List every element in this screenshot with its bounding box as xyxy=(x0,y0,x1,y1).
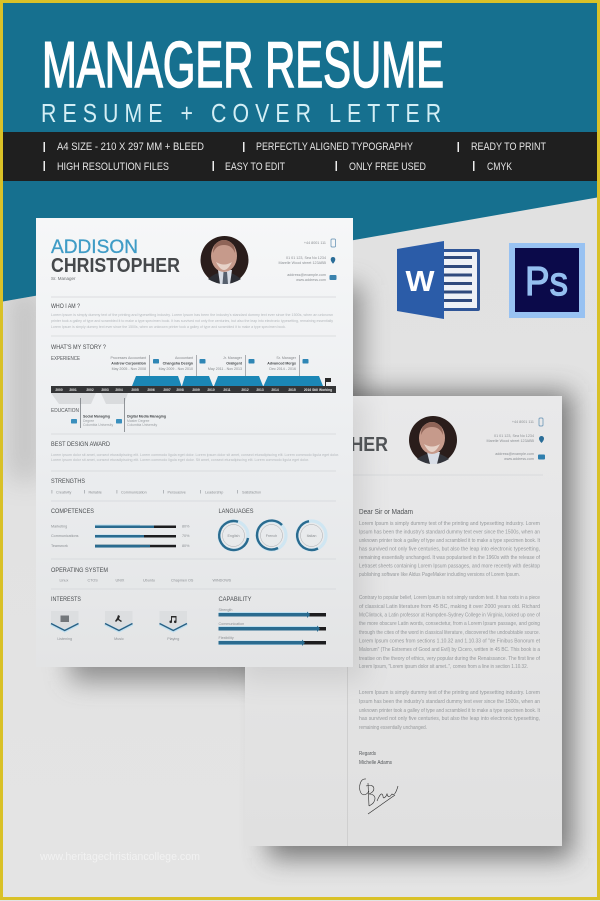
timeline years: 2009 xyxy=(192,388,200,392)
competences: COMPETENCES xyxy=(51,508,94,515)
competences: Communications xyxy=(51,534,79,538)
letter paragraph three: remaining essentially unchanged. xyxy=(359,725,427,731)
what's my story heading: WHAT'S MY STORY ? xyxy=(51,344,106,351)
row two features: ONLY FREE USED xyxy=(349,161,426,173)
shadow: resume over cover letter xyxy=(240,396,365,681)
experience labels: May 2009 - Nov 2010 xyxy=(159,367,193,371)
letter paragraph three: Ipsum has been the industry's standard dummy text ever since the 1500s, when an xyxy=(359,699,540,705)
timeline years: 2013 xyxy=(256,388,264,392)
experience labels: Andrew Corporation xyxy=(111,362,146,366)
name: Sr. Manager xyxy=(51,276,76,281)
timeline bar xyxy=(51,386,336,393)
row one features: READY TO PRINT xyxy=(471,141,546,153)
shadow: cover letter xyxy=(268,392,572,858)
who i am xyxy=(51,303,333,329)
languages xyxy=(218,508,326,550)
education entries: Digital Media Managing xyxy=(127,414,167,418)
left edge shading xyxy=(8,290,42,480)
letter paragraph one: Ipsum has been the industry's standard dummy text ever since the 1500s, when an xyxy=(359,530,540,536)
best design award: BEST DESIGN AWARD xyxy=(51,441,110,448)
timeline years: 2014 xyxy=(271,388,279,392)
language ring: Italian: Italian xyxy=(307,534,316,538)
salutation: Dear Sir or Madam xyxy=(359,509,413,516)
strengths: Communication xyxy=(121,490,147,494)
strengths xyxy=(51,478,261,494)
experience labels xyxy=(110,356,297,371)
cover letter contact details: 01 01 123, Sea No 1234 xyxy=(494,434,534,438)
language ring: English: English xyxy=(227,534,240,538)
operating system: CTOS xyxy=(88,578,98,582)
letter paragraph two: Lorem Ipsum comes from sections 1.10.32 and 1.10.33 of "de Finibus Bonorum et xyxy=(359,638,541,644)
operating system: UNIX xyxy=(116,578,125,582)
contact details: www.address.com xyxy=(296,278,326,282)
strengths: Persuasive xyxy=(168,490,186,494)
timeline years: 2001 xyxy=(69,388,77,392)
sign-off: Regards xyxy=(359,751,376,757)
cover letter contact details: Marelle Wood street 123ABB xyxy=(487,439,535,443)
sign-off xyxy=(359,751,392,766)
timeline years: 2015 xyxy=(288,388,296,392)
interests xyxy=(51,596,187,641)
competences xyxy=(51,508,190,548)
letter paragraph three: Lorem Ipsum is simply dummy text of the printing and typesetting industry. Lorem xyxy=(359,690,540,696)
cover letter contact details xyxy=(487,418,545,461)
capability xyxy=(218,596,326,646)
competences: 80% xyxy=(182,524,190,528)
letter paragraph three: has survived not only five centuries, but also the leap into electronic typesetting, xyxy=(359,716,540,722)
experience stems xyxy=(150,355,300,376)
letter paragraph one: unknown printer took a galley of type and scrambled it to make a type specimen book. It xyxy=(359,538,541,544)
row two features: HIGH RESOLUTION FILES xyxy=(57,161,169,173)
experience labels: Dec 2014 - 2016 xyxy=(269,367,296,371)
name xyxy=(51,237,180,281)
row one features xyxy=(44,141,546,153)
letter paragraph two: Contrary to popular belief, Lorem Ipsum is not simply random text. It has roots in a piece xyxy=(359,595,540,601)
sign-off: Michelle Adams xyxy=(359,760,392,766)
name: ADDISON xyxy=(51,237,138,258)
strengths: STRENGTHS xyxy=(51,478,85,485)
strengths: Reliable xyxy=(88,490,102,494)
contact details xyxy=(279,239,336,282)
timeline chart xyxy=(51,355,336,404)
experience labels: Changsha Design xyxy=(163,362,193,366)
shadow: resume xyxy=(70,285,362,681)
competences: 80% xyxy=(182,544,190,548)
icon: Photoshop xyxy=(509,243,585,318)
cover letter name: CHRISTOPHER xyxy=(259,434,388,456)
letter paragraph one: has survived not only five centuries, but also the leap into electronic typesetting, xyxy=(359,546,540,552)
contact details: Marelle Wood street 123ABB xyxy=(279,261,327,265)
education entries: Degree xyxy=(83,419,94,423)
timeline years: 2000 xyxy=(55,388,63,392)
margin line xyxy=(347,660,348,846)
letter paragraph two: McClintock, a Latin professor at Hampden-Sydney College in Virginia, looked up one of xyxy=(359,612,541,618)
timeline years: 2016 Still Working xyxy=(304,388,332,392)
timeline years: 2010 xyxy=(207,388,215,392)
contact details: +44 8001 111 xyxy=(304,241,326,245)
letter paragraph three: unknown printer took a galley of type and scrambled it to make a type specimen book. It xyxy=(359,708,541,714)
cover letter contact details: www.address.com xyxy=(504,457,534,461)
education heading: EDUCATION xyxy=(51,408,79,414)
experience labels: Jr. Manager xyxy=(223,356,243,360)
strengths: Creativity xyxy=(56,490,72,494)
operating system: WINDOWS xyxy=(212,578,232,582)
who i am: WHO I AM ? xyxy=(51,303,80,310)
interest: playing: Playing xyxy=(167,637,179,641)
letter paragraph three xyxy=(359,690,541,731)
letter paragraph two: treatise on the theory of ethics, very popular during the Renaissance. The first line of xyxy=(359,656,541,662)
timeline years: 2003 xyxy=(101,388,109,392)
experience labels: May 2005 - Nov 2008 xyxy=(112,367,146,371)
education entries: Master Degree xyxy=(127,419,150,423)
letter paragraph one xyxy=(359,521,541,578)
education entries: Columbia University xyxy=(83,423,113,427)
capability bars xyxy=(218,612,326,646)
experience labels: May 2011 - Nov 2013 xyxy=(208,367,242,371)
who i am: printer took a galley of type and scrambled it to make a type specimen book. It has survived not only five centuries, but also the leap into electronic typesetting, remaining essentially xyxy=(51,319,333,323)
operating system: OPERATING SYSTEM xyxy=(51,567,108,574)
timeline years: 2012 xyxy=(241,388,249,392)
timeline years: 2006 xyxy=(147,388,155,392)
contact details: address@example.com xyxy=(287,273,326,277)
competences: Marketing xyxy=(51,524,67,528)
education icons xyxy=(71,419,122,424)
teal diagonal banner xyxy=(0,0,600,302)
capability: CAPABILITY xyxy=(218,596,252,603)
row one features: PERFECTLY ALIGNED TYPOGRAPHY xyxy=(256,141,414,153)
competences: 70% xyxy=(182,534,190,538)
competences: Teamwork xyxy=(51,544,68,548)
row two features xyxy=(44,161,513,173)
timeline years xyxy=(55,388,332,392)
strengths: Leadership xyxy=(205,490,223,494)
letter paragraph two xyxy=(359,595,541,670)
icon: Word: W xyxy=(406,266,435,298)
row two features: CMYK xyxy=(487,161,513,173)
interests: INTERESTS xyxy=(51,596,81,603)
panel: cover letter xyxy=(245,396,562,846)
timeline years: 2005 xyxy=(131,388,139,392)
timeline years: 2008 xyxy=(176,388,184,392)
signature xyxy=(360,779,398,814)
experience labels: Oraligent xyxy=(226,362,243,366)
letter paragraph two: the more obscure Latin words, consectetur, from a Lorem Ipsum passage, and going xyxy=(359,621,540,627)
experience labels: Sr. Manager xyxy=(276,356,297,360)
interest: listening: Listening xyxy=(57,637,72,641)
best design award: Lorem ipsum dolor sit amet, consect eturadipiscing elit. Lorem commodo ligula eget dolor. Lorem ipsum dolor sit amet, consect eturadipiscing elit. Lorem commodo ligula eget dolor. xyxy=(51,453,339,457)
letter paragraph two: Malorum" (The Extremes of Good and Evil) by Cicero, written in 45 BC. This book is a xyxy=(359,647,540,653)
operating system: Chapmen OS xyxy=(171,578,194,582)
operating system: Linux xyxy=(60,578,68,582)
operating system: Ubuntu xyxy=(143,578,155,582)
row two features: EASY TO EDIT xyxy=(225,161,285,173)
row one features: A4 SIZE - 210 X 297 MM + BLEED xyxy=(57,141,204,153)
end flag xyxy=(325,378,331,386)
cover letter photo xyxy=(409,416,457,464)
watermark: www.heritagechristiancollege.com xyxy=(39,851,200,863)
icon: Word xyxy=(397,241,480,319)
letter paragraph two: Lorem Ipsum, "Lorem ipsum dolor sit amet..", comes from a line in section 1.10.32. xyxy=(359,664,528,670)
capability: Flexibility xyxy=(218,636,234,640)
competence bars xyxy=(95,524,176,548)
who i am: Lorem Ipsum is simply dummy text ever since the 1500s, when an unknown printer took a galley of type and scrambled it to make a type specimen book. xyxy=(51,325,286,329)
icon: Photoshop: Ps xyxy=(525,258,568,304)
capability: Strength xyxy=(218,608,232,612)
timeline years: 2007 xyxy=(163,388,171,392)
letter paragraph one: publishing software like Aldus PageMaker including versions of Lorem Ipsum. xyxy=(359,572,520,578)
feature bar xyxy=(0,132,600,181)
contact details: 01 01 123, Sea No 1234 xyxy=(286,256,326,260)
experience heading: EXPERIENCE xyxy=(51,356,80,362)
education entries: Columbia University xyxy=(127,423,157,427)
interest: music: Music xyxy=(114,637,124,641)
experience labels: Accountant xyxy=(175,356,193,360)
who i am: Lorem Ipsum is simply dummy text of the printing and typesetting industry. Lorem Ipsum has been the industry's standard dummy text ever since the 1500s, when an unknown xyxy=(51,313,333,317)
cover letter contact details: +44 8001 111 xyxy=(512,420,534,424)
name: CHRISTOPHER xyxy=(51,255,180,277)
strengths: Satisfaction xyxy=(242,490,261,494)
letter paragraph two: of classical Latin literature from 45 BC, making it over 2000 years old. Richard xyxy=(359,604,540,610)
letter paragraph one: Letraset sheets containing Lorem Ipsum passages, and more recently with desktop xyxy=(359,564,540,570)
education stems xyxy=(80,398,124,432)
subtitle: RESUME + COVER LETTER xyxy=(41,99,441,129)
education xyxy=(51,398,167,432)
education entries xyxy=(83,414,167,427)
education periods xyxy=(51,393,128,404)
timeline years: 2004 xyxy=(115,388,123,392)
timeline years: 2002 xyxy=(86,388,94,392)
experience labels: Advanced Mergs xyxy=(267,362,296,366)
experience periods xyxy=(132,376,323,386)
letter paragraph two: through the cites of the word in classical literature, discovered the undoubtable source. xyxy=(359,630,540,636)
panel: resume xyxy=(36,218,353,667)
operating system xyxy=(51,567,232,582)
experience icons xyxy=(153,359,308,364)
language ring: French: French xyxy=(266,534,277,538)
best design award: Lorem ipsum dolor sit amet, consect eturadipiscing elit. Lorem commodo ligula eget dolor. Sit amet, consect eturadipiscing elit. Lorem commodo ligula eget dolor. xyxy=(51,458,309,462)
cover letter contact details: address@example.com xyxy=(495,452,534,456)
letter paragraph one: Lorem Ipsum is simply dummy text of the printing and typesetting industry. Lorem xyxy=(359,521,540,527)
letter paragraph one: remaining essentially unchanged. It was popularised in the 1960s with the release of xyxy=(359,555,541,561)
experience labels: Processes Accountant xyxy=(110,356,146,360)
timeline years: 2011 xyxy=(223,388,231,392)
capability: Communication xyxy=(218,622,244,626)
education entries: Social Managing xyxy=(83,414,111,418)
profile photo xyxy=(200,236,248,284)
best design award xyxy=(51,441,339,462)
languages: LANGUAGES xyxy=(218,508,254,515)
